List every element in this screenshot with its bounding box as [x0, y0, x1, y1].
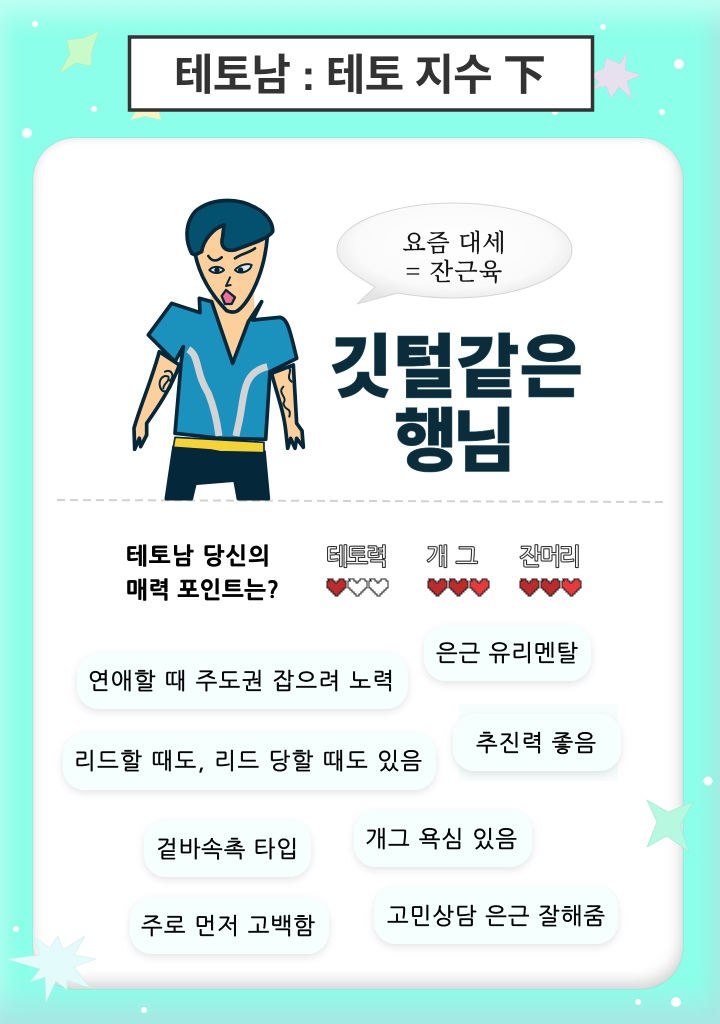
charm point heading	[126, 544, 279, 602]
hair	[187, 201, 273, 255]
rating: 잔머리	[519, 544, 581, 596]
heart filled	[541, 579, 560, 596]
trait chip	[63, 733, 436, 790]
icon: mint star	[647, 800, 693, 852]
heart empty	[348, 579, 367, 596]
eyebrows	[208, 248, 255, 260]
rating: 잔머리: 잔머리	[519, 544, 581, 569]
mouth	[222, 290, 235, 304]
shirt stripes	[188, 349, 267, 436]
heading: type name	[329, 311, 583, 485]
panel: main white card	[33, 138, 683, 989]
trait chip: 개그 욕심 있음	[365, 828, 517, 851]
rating: 개그	[426, 544, 489, 596]
heart filled	[520, 579, 539, 596]
tattoos	[160, 367, 292, 417]
charm point heading: 매력 포인트는?	[126, 578, 279, 602]
speech bubble: = 잔근육	[406, 252, 502, 287]
trait chip: 주로 먼저 고백함	[141, 915, 315, 938]
face	[195, 220, 267, 312]
shirt	[148, 298, 297, 439]
heart filled	[449, 579, 468, 596]
title	[130, 37, 592, 110]
trait chip: 리드할 때도, 리드 당할 때도 있음	[74, 750, 422, 773]
title: 테토남 : 테토 지수 下	[174, 41, 546, 103]
pale chip backing	[459, 704, 618, 781]
icon: lilac star	[590, 52, 641, 99]
speech bubble: 요즘 대세	[402, 223, 506, 258]
heart filled	[562, 579, 581, 596]
trait chip: 겉바속촉 타입	[156, 838, 298, 861]
trait chip: 고민상담 은근 잘해줌	[387, 905, 605, 928]
trait chip	[374, 887, 618, 944]
trousers	[166, 447, 268, 499]
icon: green star	[59, 31, 99, 74]
speech bubble	[337, 203, 572, 304]
eyes	[209, 264, 252, 273]
heart filled	[428, 579, 447, 596]
rating: 개그: 개 그	[426, 544, 478, 569]
rating: 테토력	[326, 544, 388, 596]
trait chip	[354, 810, 532, 867]
trait chip	[77, 653, 408, 709]
trait chip: 은근 유리멘탈	[436, 642, 578, 665]
trait chip	[130, 897, 329, 954]
neck and chest	[210, 290, 255, 365]
trait chip: 연애할 때 주도권 잡으려 노력	[88, 670, 394, 693]
heart filled	[470, 579, 489, 596]
trait chip	[144, 820, 311, 877]
heart empty	[369, 579, 388, 596]
icon: yellow star	[130, 100, 161, 120]
trait chip	[453, 714, 621, 771]
heading: type name: 행님	[394, 385, 516, 485]
right arm	[272, 365, 303, 448]
icon: pale burst	[7, 936, 96, 1002]
dashed divider	[57, 500, 665, 502]
trait chip	[424, 625, 591, 681]
rating: 테토력: 테토력	[326, 544, 388, 569]
left arm	[134, 352, 179, 449]
nose	[226, 277, 231, 286]
belt	[173, 437, 264, 453]
charm point heading: 테토남 당신의	[126, 544, 270, 568]
trait chip: 추진력 좋음	[476, 732, 596, 755]
heading: type name: 깃털같은	[329, 311, 583, 411]
heart filled	[327, 579, 346, 596]
illustration: man with tattoos	[134, 201, 303, 499]
